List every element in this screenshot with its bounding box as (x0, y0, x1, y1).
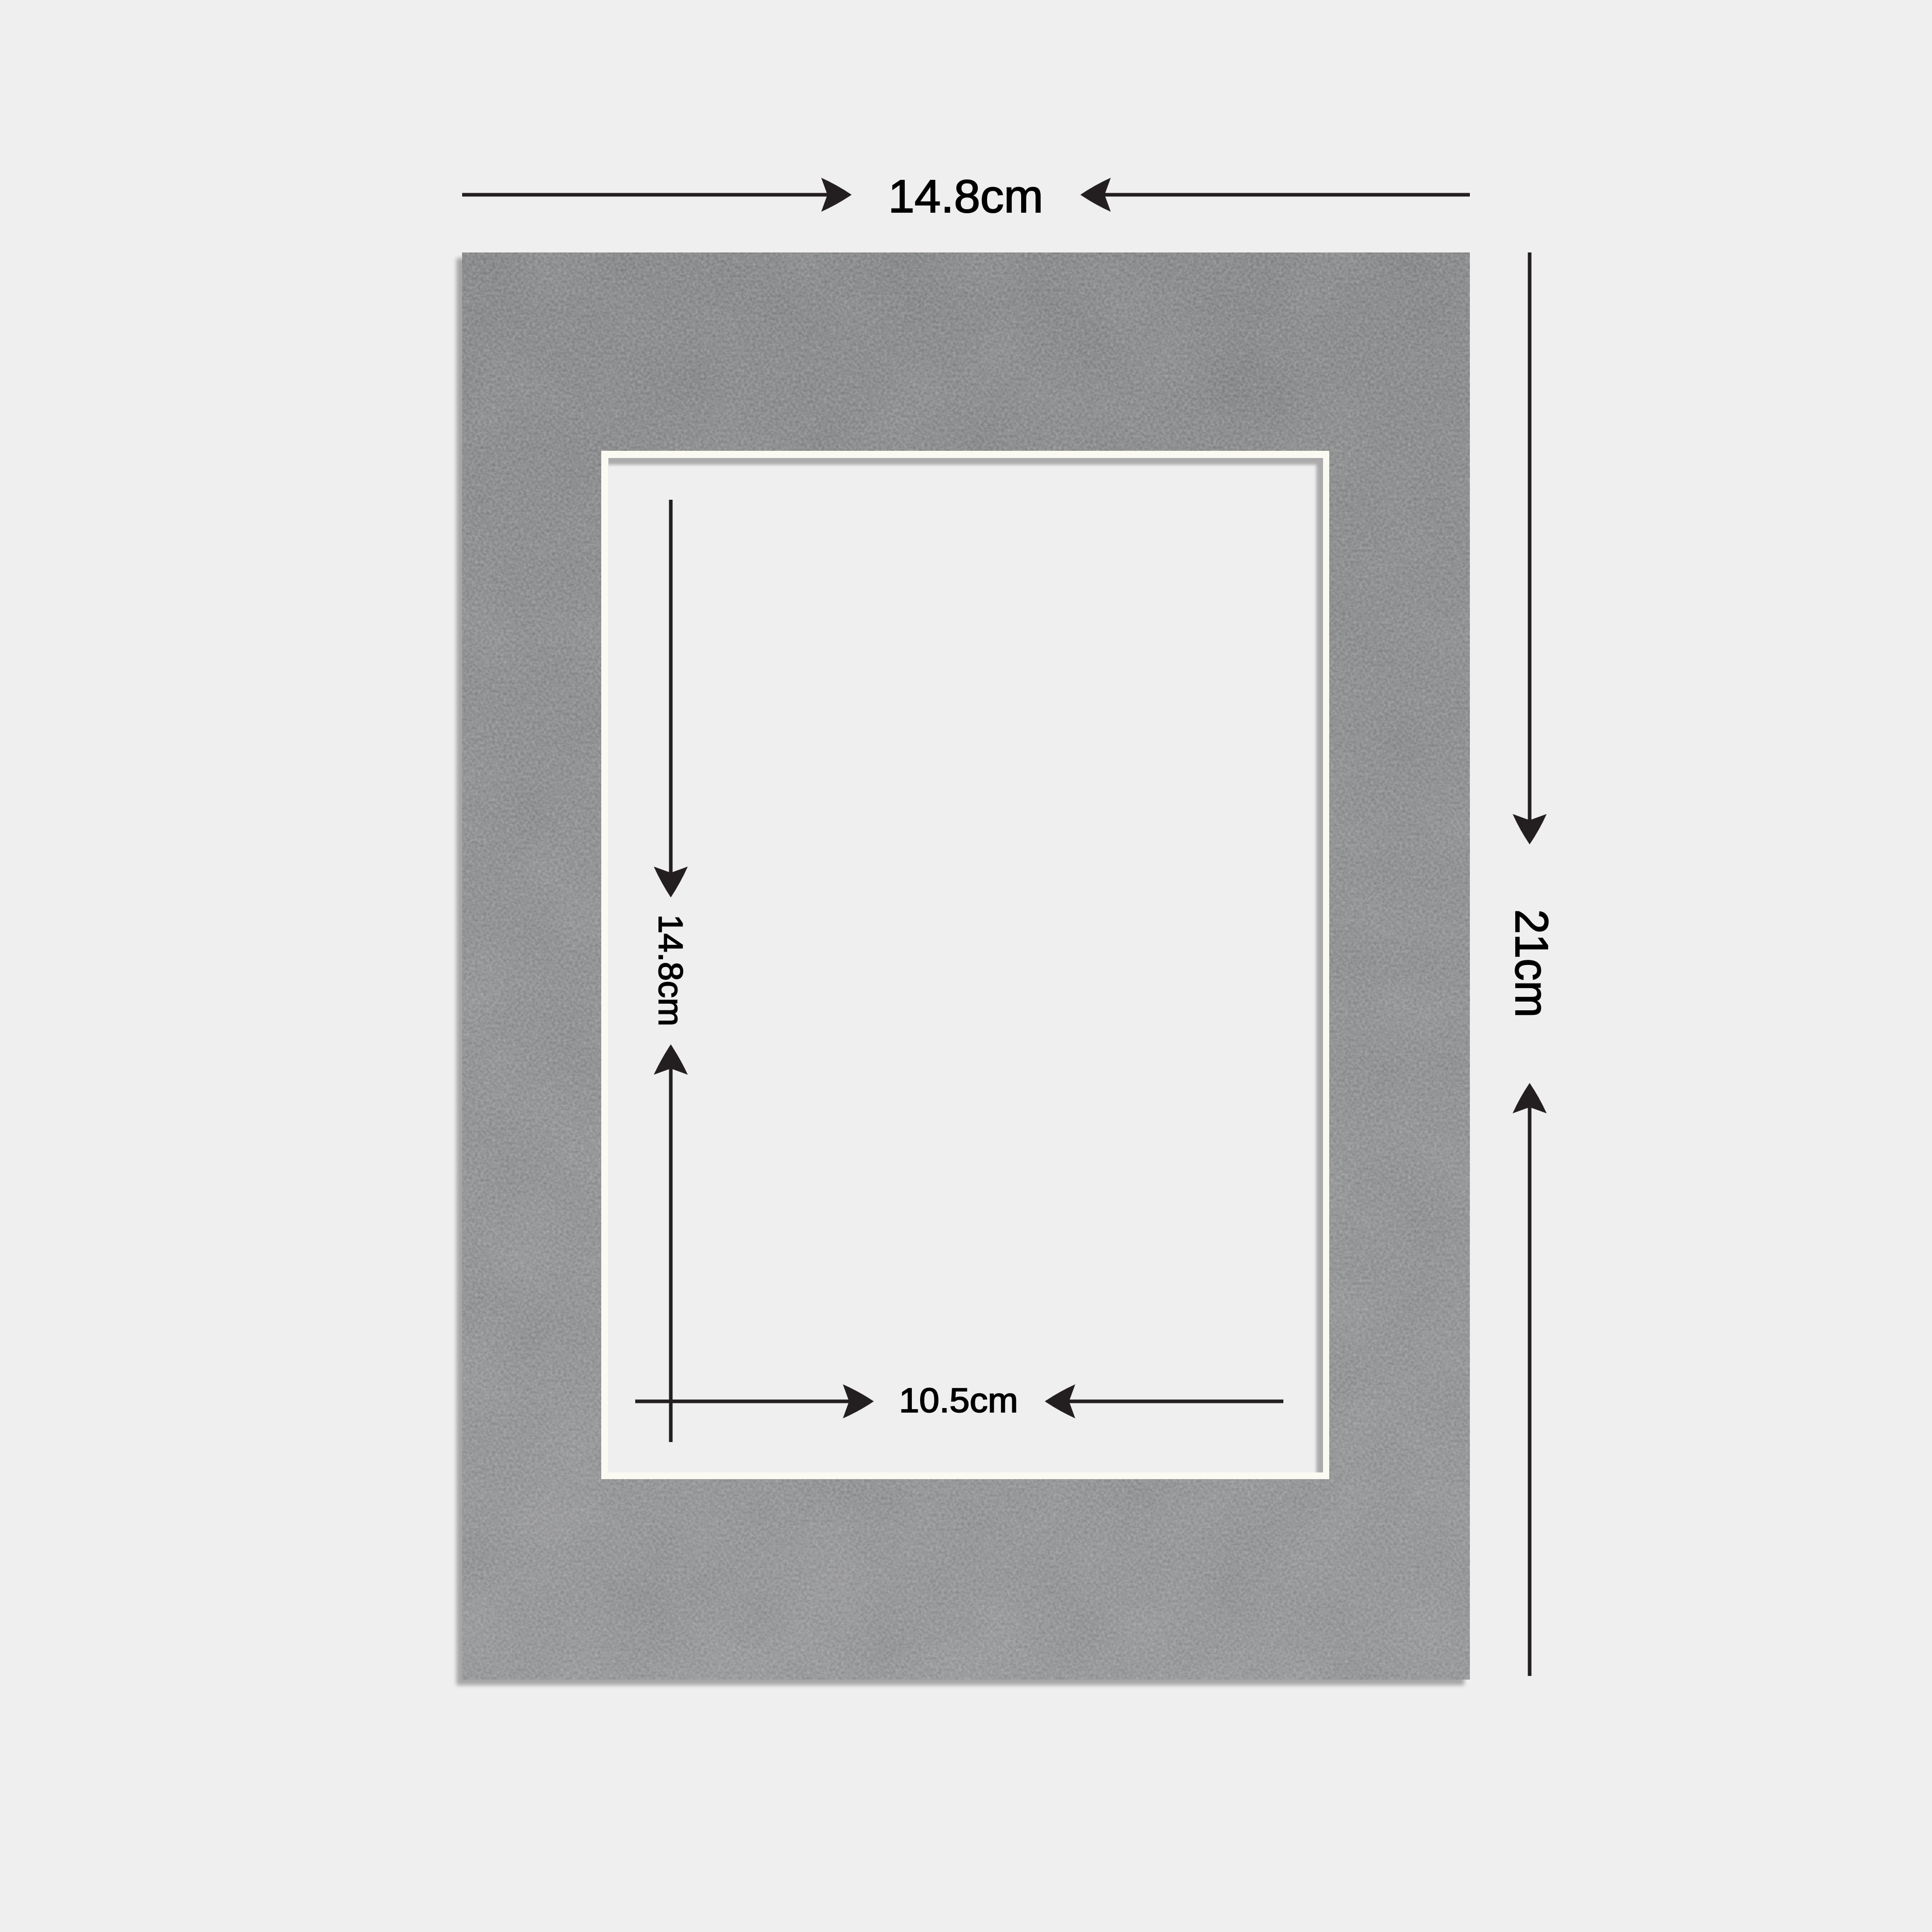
label: outer width: 14.8cm (888, 171, 1043, 223)
mount paper texture (462, 252, 1470, 1680)
arrow: top right pointing left (1080, 178, 1470, 212)
label: inner width: 10.5cm (899, 1381, 1018, 1420)
arrow: right side pointing up (1513, 1083, 1547, 1676)
cream bevel of window (601, 451, 1329, 1479)
infographic canvas (454, 178, 1549, 1688)
arrow: inner left pointing up (654, 1044, 688, 1442)
window opening (608, 458, 1323, 1472)
arrow: inner bottom pointing right (635, 1384, 874, 1418)
label: outer height: 21cm (1505, 909, 1557, 1018)
mount paper mottling (462, 252, 1470, 1680)
arrow: inner bottom pointing left (1045, 1384, 1283, 1418)
arrow: inner left pointing down (654, 500, 688, 897)
panel: grey photo mount (456, 252, 1470, 1685)
label: inner height: 14.8cm (652, 914, 690, 1026)
arrow: top left pointing right (462, 178, 852, 212)
mount board (462, 252, 1470, 1680)
window inner shadow (608, 458, 1323, 1472)
arrow: right side pointing down (1513, 252, 1547, 844)
mount drop shadow (456, 258, 1464, 1685)
